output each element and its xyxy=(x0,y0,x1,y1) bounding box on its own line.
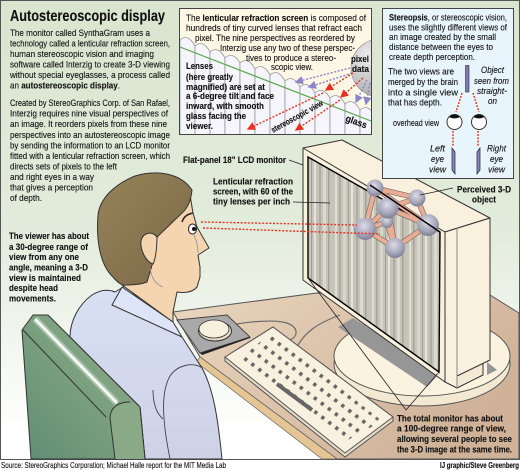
left eye view: eye xyxy=(431,154,444,165)
lenses xyxy=(180,37,371,134)
lenticular screen text xyxy=(186,13,366,73)
intro text: software called Interzig to create 3-D viewing xyxy=(10,60,170,70)
perceived object label xyxy=(420,184,511,206)
intro text: human stereoscopic vision and imaging xyxy=(10,49,154,60)
viewer range caption: view is maintained xyxy=(9,273,81,284)
intro text xyxy=(9,28,170,92)
lenticular screen text: tives to produce a stereo- xyxy=(246,53,336,64)
mouse pad and mouse xyxy=(177,315,250,355)
eye and brow xyxy=(182,213,196,234)
lenticular screen text: hundreds of tiny curved lenses that refract each xyxy=(186,23,362,34)
lens screen label: screen, with 60 of the xyxy=(213,186,293,198)
lenses caption: inward, with smooth xyxy=(186,101,264,112)
monitor range caption: The total monitor has about xyxy=(397,414,504,424)
stereopsis text xyxy=(389,12,507,63)
object caption: Object xyxy=(481,65,504,76)
lenses caption: viewer. xyxy=(186,121,213,132)
lens screen label xyxy=(213,176,330,208)
lenticular screen text: pixel. The nine perspectives as reordered by xyxy=(195,33,355,44)
hair xyxy=(98,173,192,285)
view lines xyxy=(453,93,479,147)
object bar xyxy=(466,66,469,92)
lenses caption: magnified) are set at xyxy=(186,82,266,93)
lenticular screen text: Interzig use any two of these perspec- xyxy=(220,43,355,54)
creation text: directs sets of pixels to the left xyxy=(10,162,117,172)
stereopsis text: distance between the eyes to xyxy=(389,42,493,53)
merged views text: into a single view xyxy=(388,88,458,98)
merged views text: that has depth. xyxy=(388,98,442,108)
lenticular screen text: scopic view. xyxy=(271,62,313,73)
glass label: glass xyxy=(344,113,368,131)
creation text: Created by StereoGraphics Corp. of San Rafael, xyxy=(10,98,170,109)
viewer range caption: view from any one xyxy=(9,252,79,263)
lenses caption: a 6-degree tilt and face xyxy=(186,91,274,102)
neck and face xyxy=(122,195,209,322)
pixel data sphere xyxy=(350,40,371,96)
right eye view: eye xyxy=(490,154,503,165)
viewer range caption: movements. xyxy=(9,294,56,304)
viewer range caption xyxy=(9,231,90,304)
lavender arrows xyxy=(296,68,370,104)
object caption xyxy=(474,65,509,107)
arm line xyxy=(153,365,202,459)
creation text: that gives a perception xyxy=(10,182,93,194)
left eye view xyxy=(429,144,455,176)
merged views text xyxy=(388,66,458,108)
object caption: seen from xyxy=(474,76,509,87)
viewer range caption: despite head xyxy=(9,283,58,294)
object caption: on xyxy=(488,96,497,107)
creation text: an image. It reorders pixels from these nine xyxy=(10,119,167,130)
intro text: an autostereoscopic display. xyxy=(10,80,120,92)
source line: Source: StereoGraphics Corporation; Michael Halle report for the MIT Media Lab xyxy=(1,460,226,470)
merged views text: merged by the brain xyxy=(388,77,458,88)
eyes xyxy=(447,114,486,130)
lens screen label: Lenticular refraction xyxy=(213,176,293,188)
intro text: technology called a lenticular refraction screen, xyxy=(10,38,170,50)
collar xyxy=(112,287,182,337)
monitor base xyxy=(334,316,510,406)
intro text: without special eyeglasses, a process called xyxy=(9,70,170,81)
pixel data label: data xyxy=(352,64,370,75)
lens screen label: tiny lenses per inch xyxy=(213,196,290,208)
creation text: by sending the information to an LCD monitor xyxy=(10,140,171,152)
left eye view: view xyxy=(429,164,447,176)
stereopsis text: create depth perception. xyxy=(389,52,475,63)
chair xyxy=(22,315,145,459)
panel: lenticular screen xyxy=(179,8,372,135)
monitor range caption: a 100-degree range of view, xyxy=(397,424,506,434)
viewer range caption: angle, meaning a 3-D xyxy=(9,262,88,274)
perceived object label: Perceived 3-D xyxy=(457,184,511,196)
ear xyxy=(141,233,157,264)
right eye view xyxy=(477,144,506,176)
monitor range caption xyxy=(397,414,512,456)
creation text: Interzig requires nine visual perspectives of xyxy=(10,108,168,120)
panel: stereopsis xyxy=(382,8,514,178)
viewer range caption: a 30-degree range of xyxy=(9,242,89,253)
stereoscopic view label: stereoscopic view xyxy=(269,98,325,135)
creation text: of depth. xyxy=(10,193,42,204)
keyboard xyxy=(225,327,393,457)
creation text: and right eyes in a way xyxy=(10,172,94,183)
pixel data label: pixel xyxy=(351,54,369,65)
creation text: fitted with a lenticular refraction screen, which xyxy=(10,151,170,162)
desk xyxy=(173,293,519,459)
viewer xyxy=(70,173,222,459)
stereopsis text: an image created by the small xyxy=(389,32,496,43)
red arrows xyxy=(248,73,363,130)
right eye view: view xyxy=(488,164,506,176)
object caption: straight- xyxy=(477,86,507,97)
right eye view: Right xyxy=(487,144,506,154)
perceived object label: object xyxy=(472,194,497,206)
perceived 3-D molecule xyxy=(354,180,440,258)
monitor label: Flat-panel 18" LCD monitor xyxy=(183,155,286,166)
left eye view: Left xyxy=(430,144,445,154)
lenses caption: (here greatly xyxy=(186,72,234,83)
cables xyxy=(232,315,340,345)
sight lines xyxy=(201,222,380,234)
creation text xyxy=(10,98,171,204)
intro text: The monitor called SynthaGram uses a xyxy=(10,28,151,39)
monitor xyxy=(303,140,490,388)
lenses caption xyxy=(186,61,274,132)
viewer range caption: The viewer has about xyxy=(9,231,90,242)
lenses caption: glass facing the xyxy=(186,111,246,122)
creation text: perspectives into an autostereoscopic image xyxy=(10,130,170,141)
title: Autostereoscopic display xyxy=(10,8,165,25)
shirt xyxy=(70,286,222,459)
merged views text: The two views are xyxy=(388,66,454,78)
lenses caption: Lenses xyxy=(186,61,213,72)
pixel data label xyxy=(351,54,370,75)
mouse xyxy=(198,320,232,341)
viewing cone lines xyxy=(308,278,439,410)
lenticular screen text: The lenticular refraction screen is composed of xyxy=(186,13,366,24)
overhead view label: overhead view xyxy=(393,118,439,129)
lenticular screen xyxy=(308,157,440,372)
